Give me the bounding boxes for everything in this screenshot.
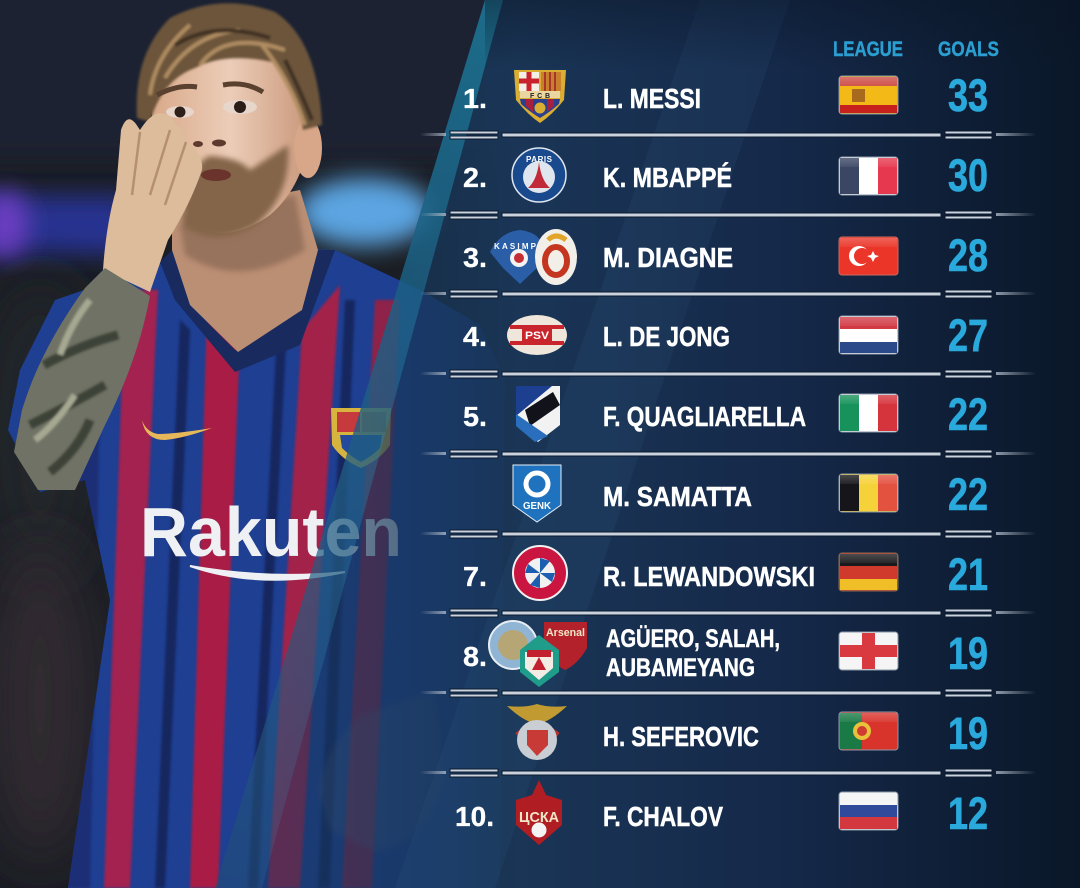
flag: Portugal (839, 712, 898, 750)
row 1: Messi (463, 70, 988, 123)
goals: 19 (948, 708, 988, 759)
row 7: Lewandowski (463, 546, 988, 600)
eyes and brows (157, 84, 263, 147)
flag: France (839, 157, 898, 195)
mouth (201, 169, 231, 181)
goals: 28 (948, 230, 988, 281)
jersey (8, 250, 494, 888)
flag: Spain (839, 76, 898, 114)
ghost hand (318, 692, 445, 852)
goals: 21 (948, 549, 988, 600)
crest: PSG: PARIS (526, 155, 553, 164)
crest: Genk: GENK (523, 501, 552, 512)
hair (137, 3, 322, 130)
row 6: Samatta (513, 465, 988, 522)
name: H. SEFEROVIC (603, 721, 759, 752)
crest: CSKA (516, 780, 562, 845)
row 10: Chalov (455, 780, 988, 845)
row 3: Diagne (463, 229, 988, 285)
flag: Belgium (839, 474, 898, 512)
name: M. SAMATTA (603, 481, 752, 512)
goals: 22 (948, 389, 988, 440)
row 9: Seferovic (507, 704, 988, 760)
row 5: Quagliarella (463, 386, 988, 442)
accent band (215, 0, 503, 888)
head (150, 28, 310, 233)
crest: Genk (513, 465, 561, 522)
row 2: Mbappe (463, 148, 988, 202)
row 8: Aguero, Salah, Aubameyang (463, 621, 988, 687)
hand (103, 113, 202, 292)
beard (183, 145, 288, 237)
names: AGÜERO, SALAH, (606, 624, 780, 653)
crests: Kasimpasa and Galatasaray (490, 229, 577, 285)
rank: 2. (463, 162, 487, 193)
light band (395, 0, 790, 888)
crests: Kasimpasa and Galatasaray: KASIMP (494, 242, 537, 251)
crest: PSV: PSV (525, 330, 550, 342)
flag: Russia (839, 792, 898, 830)
rank: 5. (463, 401, 487, 432)
crest: Barcelona (514, 70, 566, 123)
column heading: goals: GOALS (938, 38, 999, 61)
crests: Manchester City, Arsenal, Liverpool: Arsenal (546, 627, 585, 639)
name: K. MBAPPÉ (603, 162, 732, 193)
crest: Bayern (513, 546, 567, 600)
flag: Germany (839, 553, 898, 591)
rank: 1. (463, 83, 487, 114)
flag: England (839, 632, 898, 670)
name: F. QUAGLIARELLA (603, 401, 806, 432)
forearm with tattoo (14, 268, 150, 490)
name: L. DE JONG (603, 321, 730, 352)
crest: Benfica (507, 704, 567, 760)
rank: 7. (463, 561, 487, 592)
crest: CSKA: ЦСКА (519, 809, 559, 826)
goals: 27 (948, 310, 988, 361)
names (606, 624, 780, 682)
name: F. CHALOV (603, 801, 723, 832)
rank: 4. (463, 321, 487, 352)
name: M. DIAGNE (603, 242, 733, 273)
goals: 12 (948, 788, 988, 839)
flag: Netherlands (839, 316, 898, 354)
names: AUBAMEYANG (606, 654, 755, 682)
sponsor: Rakuten (140, 493, 402, 571)
crests: Manchester City, Arsenal, Liverpool (489, 621, 587, 687)
column heading: league: LEAGUE (833, 38, 903, 61)
photo: player (0, 0, 520, 888)
name: L. MESSI (603, 83, 701, 114)
name: R. LEWANDOWSKI (603, 561, 815, 592)
rank: 8. (463, 641, 487, 672)
crest: PSV (507, 315, 567, 355)
crest: PSG (512, 148, 566, 202)
crest: Sampdoria (516, 386, 560, 442)
goals: 19 (948, 628, 988, 679)
flag: Italy (839, 394, 898, 432)
rank: 10. (455, 801, 494, 832)
collar (160, 250, 335, 372)
crest: Barcelona: FCB (530, 93, 550, 100)
goals: 33 (948, 70, 988, 121)
chest crest (331, 408, 391, 468)
neck (172, 190, 318, 352)
row 4: De Jong (463, 310, 988, 361)
ear (294, 118, 322, 178)
nike swoosh (142, 420, 212, 440)
goals: 22 (948, 469, 988, 520)
flag: Turkey (839, 237, 898, 275)
goals: 30 (948, 150, 988, 201)
rank: 3. (463, 242, 487, 273)
